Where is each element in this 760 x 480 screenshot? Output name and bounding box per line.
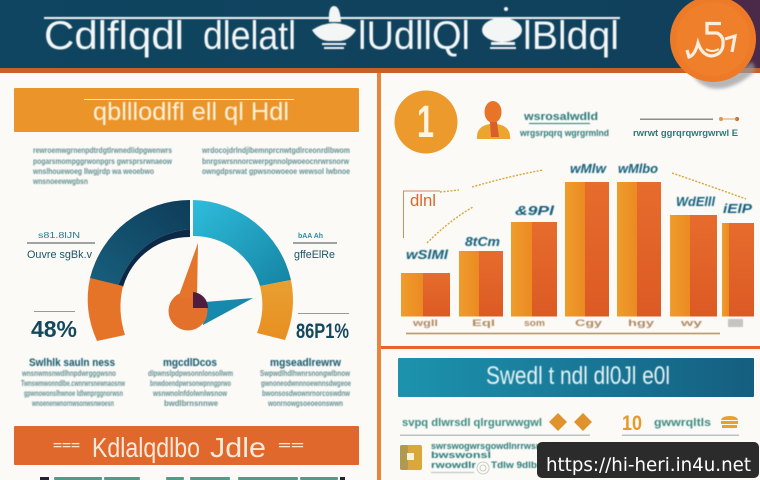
- text block: bottom detail: Tdlw 9dlb: [491, 460, 538, 470]
- panel: left heading banner: qblllodlfl ell ql Hdl: [93, 98, 289, 126]
- gauge: dark hub quarter: [193, 292, 208, 308]
- text block: column 2: bnwdoendpwrsonwpnngprwo: [150, 379, 231, 388]
- icon: right lamp: [482, 7, 522, 49]
- panel: bottom orange banner: [14, 426, 359, 465]
- text block: bottom detail: swrswogwrsgowdlnrrwsnwglrs: [431, 441, 565, 451]
- text block: left intro: wnslhouewoeg Ilwgjrdp wa weoebwo: [32, 167, 154, 176]
- text block: column 2: mgcdlDcos: [163, 357, 217, 369]
- bottom teal strip: [40, 477, 345, 480]
- text block: column 1: gpwnowonslhwnoe ldlwnprggnorwsn: [24, 389, 123, 398]
- badge: 51: [670, 0, 756, 89]
- icon: burger: [721, 416, 738, 428]
- gauge: teal needle: [203, 298, 253, 325]
- trend arrows: dotted: [427, 170, 746, 243]
- title: Cdlflqdl: [44, 14, 184, 58]
- bar value labels: 8tCm: [465, 234, 500, 249]
- title: lBldql: [523, 14, 619, 58]
- text block: right intro: [201, 146, 350, 176]
- bar 1: [401, 273, 450, 316]
- icons: orange diamonds: [549, 413, 592, 431]
- text block: row label: svpq dlwrsdl qlrgurwwgwl: [402, 417, 542, 429]
- watermark: https://hi-heri.in4u.net: [546, 454, 751, 476]
- text block: column 2: bwdlbrnsnnwe: [164, 399, 219, 408]
- bar value labels: iElP: [723, 201, 752, 216]
- gauge: navy segment: [90, 200, 190, 286]
- text block: column 1: Swlhlk sauln ness: [29, 357, 115, 369]
- stat: 86%: 86P1%: [296, 320, 349, 343]
- text block: bottom detail: [431, 441, 565, 473]
- callout: right gauge label: gffeElRe: [294, 249, 335, 261]
- bar 2: [459, 251, 503, 316]
- bar value labels: wMlw: [570, 161, 607, 176]
- text block: column 3: Swpwdlhdlhwnrsnongwlbnow: [260, 369, 351, 378]
- title: [44, 6, 620, 58]
- bar category labels: wy: [679, 318, 702, 328]
- title: dlelatl: [203, 14, 296, 58]
- text block: column 2: [148, 357, 233, 408]
- icon: gold tile: [400, 445, 422, 470]
- text block: right legend: [633, 117, 739, 138]
- bar 4: [565, 182, 609, 316]
- text block: right legend: rwrwt ggrqrqwrgwrwl E: [633, 128, 738, 138]
- callout: left gauge label: s81.8lJN: [38, 231, 80, 240]
- stat: 86%: [296, 313, 349, 343]
- text block: column 1: wnsnwmsnwdlhnpdwrgggwsno: [21, 369, 116, 378]
- text block: column 1: Twnswmwonndlbe.cwnrwrsnewnaosnw: [21, 379, 126, 388]
- chart footnote: [406, 332, 720, 334]
- text block: left intro: rewroemwgrnenpdtrdgtlrwnedlidpgwenwrs: [33, 146, 172, 155]
- callout: right gauge label: bAA Ah: [298, 233, 323, 240]
- text block: person label: wsrosalwdld: [523, 111, 598, 123]
- text block: left intro: [32, 146, 173, 186]
- text block: right intro: wrdocojdrlndjlbemnprcnwtgdlrceonrdlbwom: [201, 146, 350, 155]
- text block: column 3: mgseadlrewrw: [270, 357, 341, 369]
- text block: person label: wrgsrpqrq wgrgrmlnd: [519, 128, 609, 138]
- gauge: dark inner band: [118, 229, 190, 287]
- bar 3: [511, 222, 557, 316]
- bar 6: [670, 215, 717, 316]
- stat: 48%: 48%: [31, 316, 77, 342]
- bar value labels: &9Pl: [515, 203, 555, 218]
- bar 5: [617, 182, 661, 316]
- bar category labels: som: [524, 318, 545, 328]
- text block: column 1: [21, 357, 126, 408]
- text block: stat label: gwwrqltls: [654, 417, 711, 429]
- panel: bottom orange banner: ==: [278, 440, 304, 452]
- panel: bottom orange banner: Jdle: [210, 432, 266, 463]
- panel: teal heading banner: Swedl t ndl dl0Jl e0l: [486, 362, 670, 390]
- text block: left intro: pogarsmompggrwonpgrs gwrsprsrwnaeow: [33, 157, 173, 166]
- row underlines: [400, 434, 739, 436]
- callout: left gauge label: [27, 231, 95, 261]
- bar value labels: [406, 161, 752, 262]
- bar category labels: wgll: [412, 318, 438, 328]
- text block: right intro: bnrgswrsnnorcwerpgnnolpwoeocnrwrsnorw: [202, 157, 350, 166]
- header band: [0, 0, 760, 73]
- stat: 10: 10: [622, 412, 642, 435]
- text block: left intro: wnsnoeewwgbsn: [32, 177, 88, 186]
- text block: column 3: bwonsosdwownrnorcoswdnw: [262, 389, 351, 398]
- gauge: hub: [168, 292, 208, 330]
- icon: left lamp: [312, 6, 356, 49]
- bar 7: [722, 223, 754, 316]
- gauge chart: [88, 200, 293, 341]
- panel: bottom orange banner: ===: [53, 440, 80, 452]
- text block: column 2: wsnwnolnfdolwnlwsnow: [152, 389, 228, 398]
- panel: bottom orange banner: Kdlalqdlbo: [92, 432, 200, 463]
- bar chart: [401, 182, 754, 316]
- gauge: orange segment: [88, 278, 125, 341]
- bar value labels: wMlbo: [618, 161, 658, 176]
- bar category labels: Cgy: [575, 318, 602, 328]
- text block: person label: [519, 111, 609, 138]
- callout: right gauge label: [293, 233, 337, 261]
- text block: column 3: wonrnowgsoeoeonswwn: [267, 399, 343, 408]
- bar category labels: [412, 318, 743, 328]
- icon: person: [477, 101, 510, 139]
- icon: spiral: [477, 462, 489, 474]
- text block: bottom detail: bwswonsl: [431, 450, 491, 460]
- panel: left heading banner: [14, 88, 359, 132]
- icon: number 1 circle: 1: [417, 96, 434, 147]
- text block: column 1: wnoenenwnornwsonwsnwoesn: [31, 399, 114, 408]
- text block: right intro: owngdpsrwat gpwsnowoeoe wewsol lwbnoe: [202, 167, 350, 176]
- callout: left gauge label: Ouvre sgBk.v: [27, 249, 92, 261]
- text block: bottom detail: rwowdlr: [431, 460, 477, 470]
- panel: teal heading banner: [398, 358, 754, 397]
- text block: column 3: gwnoneodwnnnoewnnsdwgeoe: [261, 379, 351, 388]
- text block: column 2: dlpwnslpdpwsonnlonsollwm: [148, 369, 233, 378]
- bar value labels: WdElll: [676, 194, 715, 209]
- gauge: amber segment: [257, 280, 293, 340]
- chart axis label: dlnl: [410, 191, 436, 210]
- bar category labels: hgy: [628, 318, 654, 328]
- bar category labels: Eql: [472, 318, 495, 328]
- bar value labels: wSlMl: [406, 247, 448, 262]
- icon: number 1 circle: [394, 90, 458, 154]
- text block: column 3: [260, 357, 351, 408]
- gauge: blue segment: [193, 200, 291, 286]
- chart axis label: [404, 191, 440, 238]
- watermark: [537, 442, 759, 478]
- title: lUdllQl: [358, 14, 470, 58]
- panel dividers: [377, 73, 760, 480]
- gauge: orange needle: [178, 243, 198, 298]
